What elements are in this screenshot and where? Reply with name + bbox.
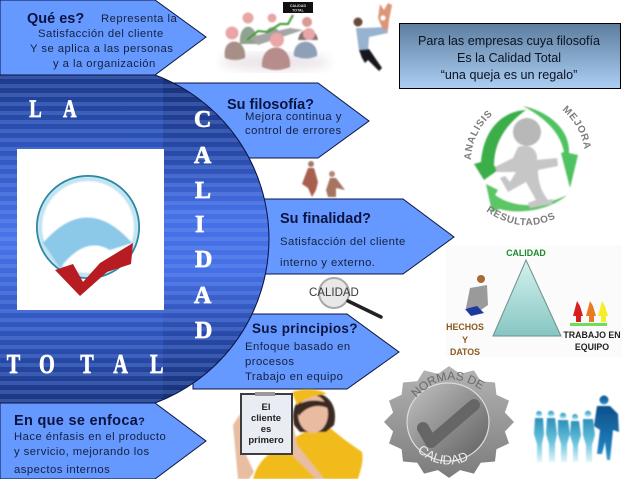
word: CALIDAD: L	[195, 178, 211, 204]
text: En que se enfoca body: y servicio, mejorando los	[14, 446, 150, 458]
arrow panel: Qué es	[0, 0, 206, 75]
chart: quality triangle	[446, 245, 622, 357]
semicircle panel: La Calidad Total	[0, 75, 269, 403]
text: Calidad: CALIDAD	[419, 446, 468, 465]
text: Qué es body: y a la organización	[53, 58, 156, 70]
text: En que se enfoca body: aspectos internos	[14, 464, 110, 476]
text: Qué es body: Satisfacción del cliente	[38, 28, 164, 40]
leader silhouette	[594, 396, 619, 460]
heading: Su finalidad: Su finalidad?	[280, 211, 371, 227]
text: Sus principios body: Enfoque basado en	[245, 341, 351, 353]
arrow panel: Su finalidad	[240, 199, 454, 274]
word: CALIDAD: D	[195, 247, 212, 273]
label: Hechos y Datos: DATOS	[450, 347, 480, 357]
illustration: customer first woman: El	[262, 402, 270, 413]
text: Sus principios body: procesos	[245, 356, 294, 368]
word: CALIDAD: D	[195, 318, 212, 344]
callout: quote box: Es la Calidad Total	[457, 51, 561, 65]
illustration: meeting team	[220, 2, 330, 71]
text: Su filosofía body: control de errores	[245, 125, 342, 137]
illustration: customer first woman	[233, 390, 363, 479]
illustration: meeting team: CALIDAD	[290, 4, 306, 8]
arrow panel: Su filosofía	[170, 83, 369, 158]
label: Calidad: CALIDAD	[506, 248, 546, 258]
illustration: customer first woman: cliente	[251, 413, 281, 424]
icon: red check mark	[55, 243, 133, 296]
text: Normas de: NORMAS DE	[411, 372, 485, 397]
text: En que se enfoca body: Hace énfasis en el producto	[14, 431, 166, 443]
icon: magnifier with Calidad	[309, 278, 381, 317]
callout: quote box	[400, 24, 620, 88]
illustration: team silhouettes	[534, 396, 619, 462]
illustration: customer first woman: es	[261, 424, 271, 435]
arrow panel: En que se enfoca	[0, 403, 206, 479]
word: TOTAL: T	[80, 350, 94, 380]
heading: Sus principios: Sus principios?	[252, 321, 358, 336]
icon: person reading	[465, 275, 488, 316]
word: CALIDAD: C	[194, 107, 211, 133]
illustration: customer first woman: primero	[248, 435, 284, 446]
panel: logo	[17, 149, 164, 310]
label: Hechos y Datos: HECHOS	[446, 322, 484, 332]
clipboard	[241, 394, 292, 454]
label: Trabajo en Equipo: TRABAJO EN	[563, 330, 621, 340]
word: TOTAL: T	[7, 350, 20, 380]
text: Qué es body: Y se aplica a las personas	[30, 43, 173, 55]
label: Trabajo en Equipo: EQUIPO	[575, 342, 609, 352]
callout: quote box: Para las empresas cuya filosofía	[418, 34, 600, 48]
icon: quality standards seal	[384, 366, 514, 478]
heading: Su filosofía: Su filosofía?	[227, 97, 314, 113]
word: TOTAL: A	[113, 350, 129, 380]
text: Qué es body: Representa la	[101, 13, 177, 25]
illustration: people figures	[302, 161, 345, 197]
text: Su finalidad body: interno y externo.	[280, 257, 375, 269]
callout: quote box: “una queja es un regalo”	[441, 68, 577, 82]
word: TOTAL: L	[150, 350, 164, 380]
label: Hechos y Datos: Y	[462, 335, 468, 345]
icon: three colored people	[570, 301, 608, 326]
text: Resultados: RESULTADOS	[486, 206, 555, 226]
word: CALIDAD: A	[194, 283, 212, 309]
word: CALIDAD: A	[194, 143, 212, 169]
text: Su finalidad body: Satisfacción del cliente	[280, 236, 406, 248]
text: Sus principios body: Trabajo en equipo	[245, 371, 343, 383]
word: TOTAL: O	[39, 350, 55, 380]
word: CALIDAD: I	[195, 212, 204, 238]
arrow panel: Sus principios	[193, 314, 399, 389]
heading: En que se enfoca: En que se enfoca?	[14, 413, 145, 429]
icon: magnifier with Calidad: CALIDAD	[309, 287, 359, 299]
illustration: businessman	[354, 3, 392, 71]
text: Analisis: ANALISIS	[464, 110, 492, 160]
text: Su filosofía body: Mejora continua y	[245, 111, 342, 123]
illustration: meeting team: TOTAL	[292, 8, 305, 12]
label: Calidad Total sign	[283, 2, 313, 13]
illustration: improvement cycle	[464, 105, 591, 226]
heading: Qué es: Qué es?	[27, 11, 84, 27]
word: LA: L	[29, 94, 42, 123]
text: Mejora: MEJORA	[562, 105, 591, 149]
triangle	[493, 260, 561, 336]
word: LA: A	[63, 94, 77, 123]
